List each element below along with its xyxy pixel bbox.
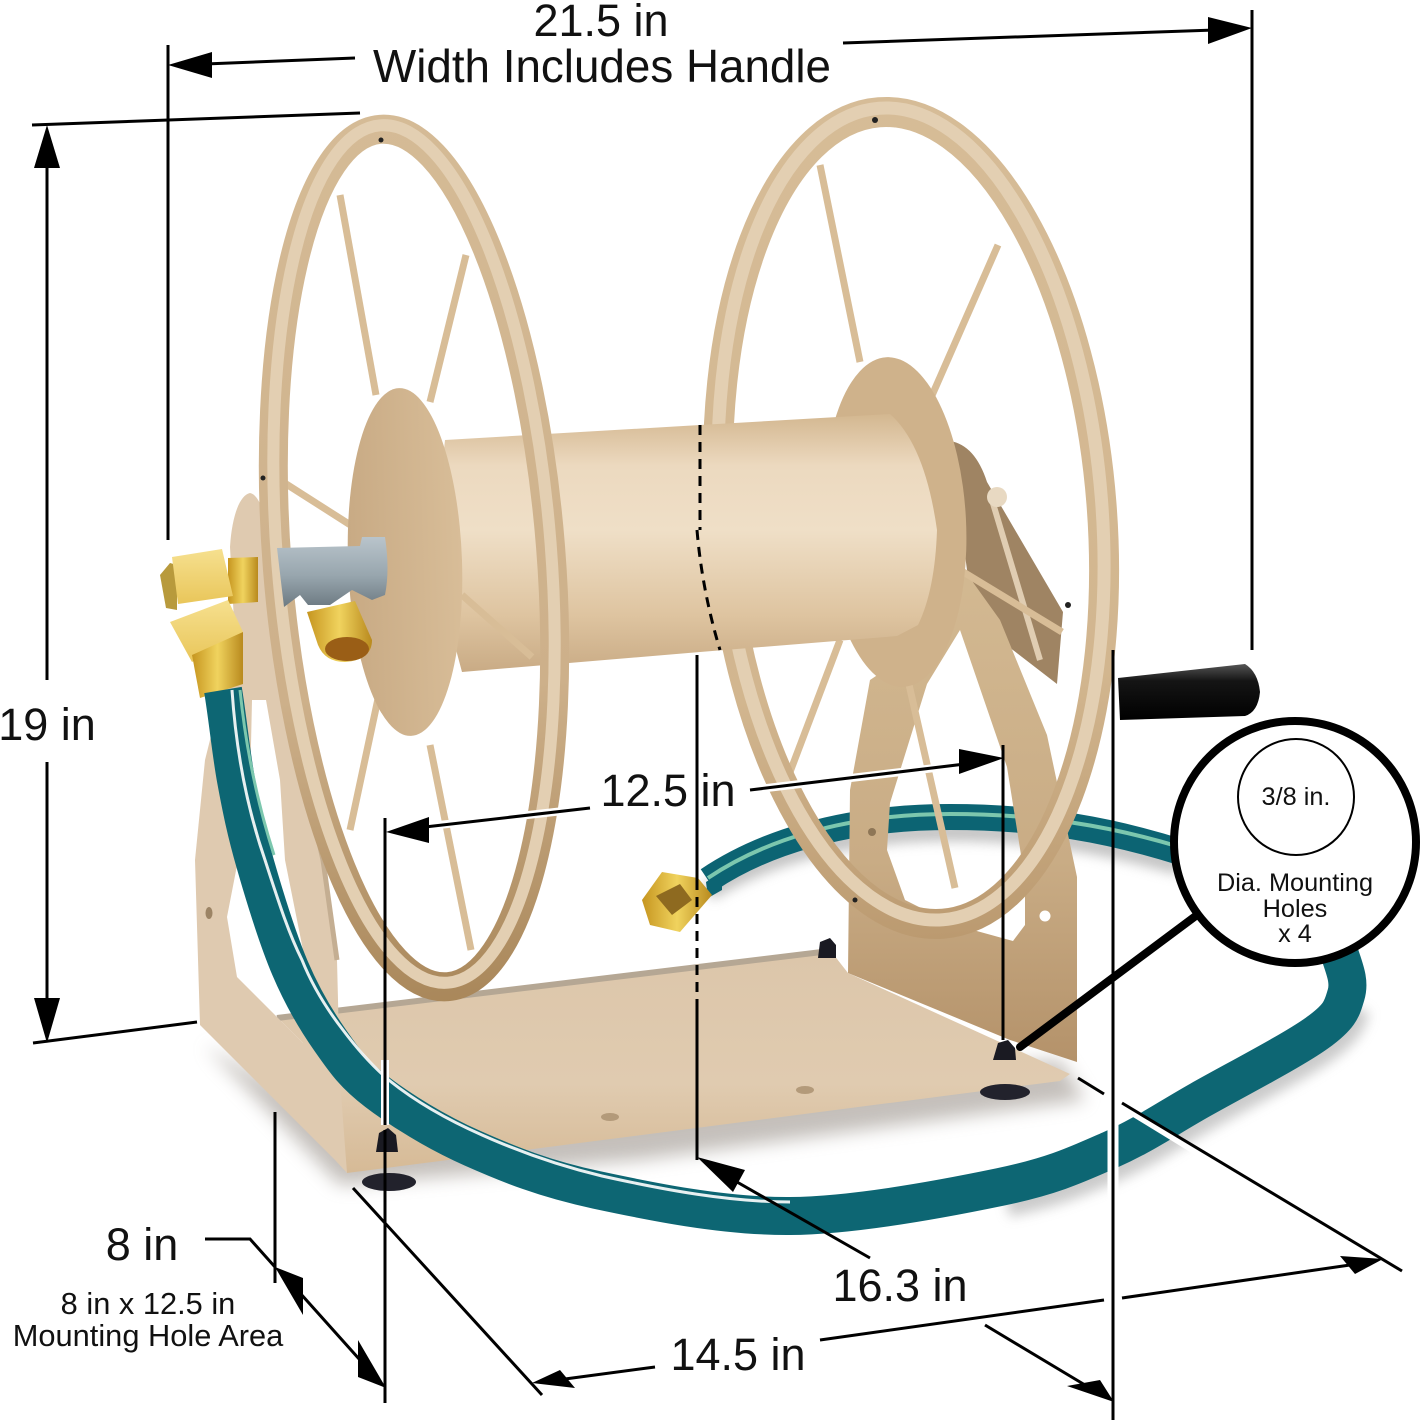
- label: 12.5 in: 12.5 in: [600, 765, 736, 816]
- rubber foot: rear: [818, 938, 836, 958]
- mounting plate right: [950, 441, 1063, 684]
- floor shadow: [205, 1045, 1085, 1185]
- callout: mounting holes: [1174, 721, 1416, 963]
- right wheel: [689, 93, 1133, 939]
- crank handle: [1118, 664, 1260, 720]
- dimension: width 21.5 in: [168, 10, 1252, 650]
- label: 19 in: 19 in: [0, 699, 96, 750]
- dimension: 8 in: [205, 1112, 386, 1403]
- label: 16.3 in: 16.3 in: [832, 1260, 968, 1311]
- label: 8 in: 8 in: [106, 1219, 178, 1270]
- left disc: [342, 386, 468, 738]
- callout: mounting holes: Holes: [1263, 895, 1327, 923]
- hose: front section: [223, 690, 1347, 1216]
- callout leader line: [1020, 915, 1197, 1047]
- label: mounting hole area: [13, 1286, 284, 1353]
- left bracket: [195, 493, 347, 1173]
- callout: mounting holes: 3/8 in.: [1262, 783, 1330, 811]
- rubber foot: front left: [362, 1128, 416, 1191]
- dimension: 12.5 in: [385, 745, 1004, 1125]
- label: width includes handle: Width Includes Handle: [373, 40, 831, 92]
- label: 14.5 in: 14.5 in: [670, 1329, 806, 1380]
- dimension: 14.5 in: [353, 1078, 1402, 1395]
- left wheel: [244, 115, 584, 997]
- iron T fitting: [277, 537, 388, 607]
- label: mounting hole area: 8 in x 12.5 in: [61, 1286, 235, 1321]
- hose end fitting: [642, 872, 712, 932]
- right bracket: [848, 560, 1077, 1062]
- right disc: [815, 354, 975, 690]
- drum: [440, 414, 937, 672]
- dimension: 16.3 in: [697, 650, 1114, 1420]
- hose: shadow: [1006, 1007, 1352, 1199]
- center dashed lines: [697, 425, 720, 1160]
- callout: mounting holes: Dia. Mounting: [1217, 869, 1373, 897]
- brass coupling: [160, 549, 258, 698]
- dimension: height 19 in: [32, 113, 360, 1043]
- callout: mounting holes: x 4: [1278, 920, 1312, 948]
- hose: rear section: [706, 814, 1180, 898]
- base plate: [277, 950, 1070, 1173]
- left wheel spokes: [283, 195, 532, 950]
- brass outlet: [307, 601, 372, 662]
- rubber foot: front right: [980, 1040, 1030, 1100]
- label: mounting hole area: Mounting Hole Area: [13, 1318, 284, 1353]
